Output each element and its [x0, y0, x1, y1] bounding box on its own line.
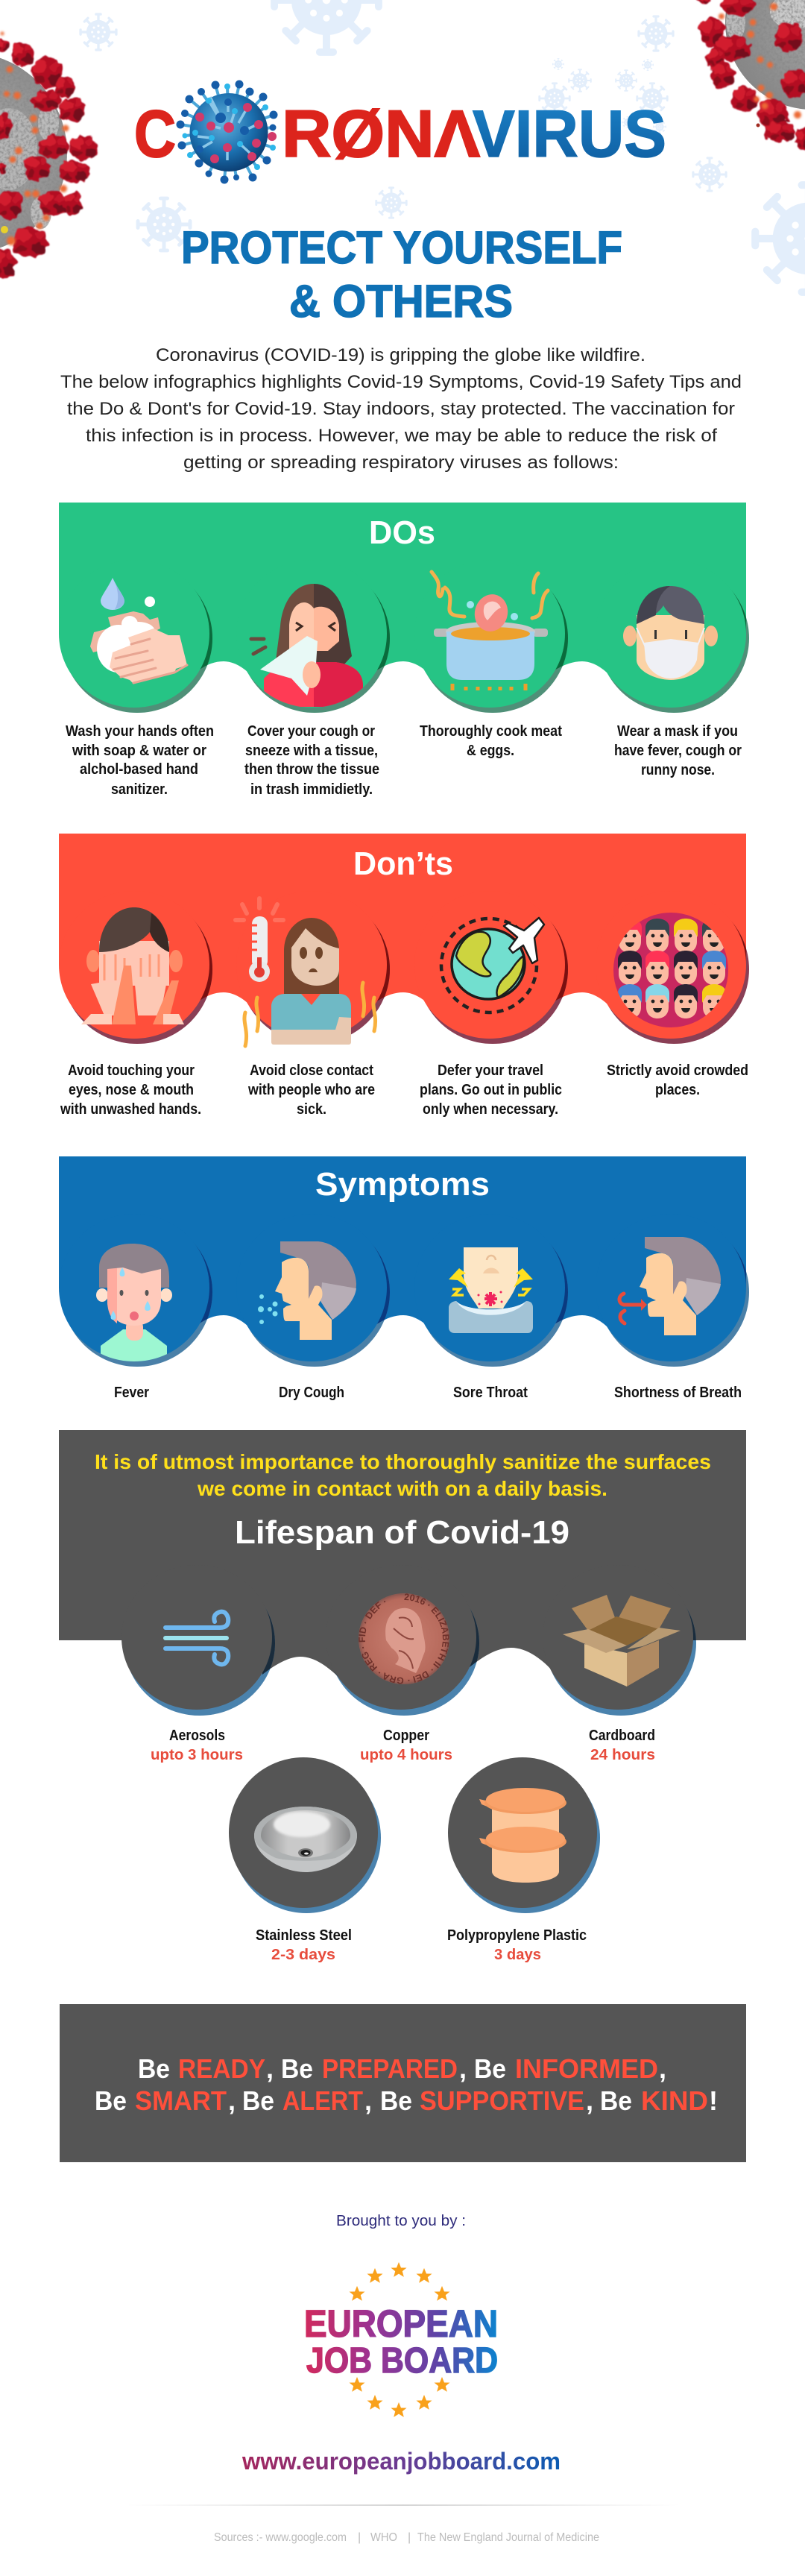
text block: line 1: PREPARED	[322, 2053, 458, 2084]
logo: European Job Board	[304, 2262, 498, 2417]
labels: DOs: sneeze with a tissue,	[245, 742, 378, 759]
text block: line 2: Be	[380, 2085, 412, 2116]
labels: Don'ts: with unwashed hands.	[60, 1100, 201, 1118]
icon: washing hands	[90, 578, 187, 684]
text block: line 2: Be	[600, 2085, 632, 2116]
sources footer: Sources :- www.google.com	[214, 2531, 347, 2544]
intro text block: the Do & Dont's for Covid-19. Stay indoors, stay protected. The vaccination for	[67, 399, 735, 419]
text block: line 1: ,	[659, 2053, 666, 2084]
labels: lower surfaces	[256, 1927, 587, 1963]
panel: DOs	[59, 503, 749, 798]
intro text block: Coronavirus (COVID-19) is gripping the globe like wildfire.	[156, 345, 645, 365]
logo: CORONAVIRUS: RØNΛ	[282, 96, 480, 171]
labels: DOs: & eggs.	[467, 742, 514, 759]
labels: DOs	[66, 722, 742, 798]
text block: line 2: SMART	[135, 2085, 227, 2116]
icon: pot cooking meat	[432, 572, 548, 690]
logo: CORONAVIRUS	[134, 81, 666, 183]
logo: CORONAVIRUS: C	[134, 96, 176, 171]
labels: Don'ts: with people who are	[247, 1081, 375, 1098]
labels: DOs: alchol-based hand	[80, 760, 198, 778]
labels: upper surfaces: Aerosols	[169, 1727, 225, 1744]
intro text block: The below infographics highlights Covid-19 Symptoms, Covid-19 Safety Tips and	[60, 372, 742, 392]
logo: CORONAVIRUS: VIRUS	[473, 96, 666, 171]
labels: Symptoms: Fever	[114, 1384, 149, 1401]
labels: DOs: sanitizer.	[111, 781, 168, 798]
text block: line 2: ,	[364, 2085, 372, 2116]
labels: Symptoms	[114, 1384, 742, 1401]
labels: DOs: Thoroughly cook meat	[420, 722, 562, 740]
labels: Don'ts: only when necessary.	[423, 1100, 558, 1118]
text block: line 2: Be	[95, 2085, 127, 2116]
callout: sanitize surfaces	[95, 1450, 711, 1500]
labels: Don'ts: sick.	[297, 1100, 326, 1118]
text block: line 2: KIND	[641, 2085, 708, 2116]
labels: Symptoms: Dry Cough	[279, 1384, 344, 1401]
text block: line 1: Be	[474, 2053, 506, 2084]
labels: Don'ts	[60, 1062, 748, 1118]
title: & OTHERS	[289, 276, 513, 327]
text block: line 2: ,	[228, 2085, 236, 2116]
labels: Don'ts: Strictly avoid crowded	[607, 1062, 748, 1079]
icon: crowd of people	[613, 913, 728, 1027]
labels: upper surfaces	[151, 1727, 655, 1763]
labels: upper surfaces: Cardboard	[589, 1727, 655, 1744]
icon: sore throat	[449, 1247, 533, 1333]
labels: lower surfaces: 3 days	[494, 1946, 541, 1963]
text block: line 2: !	[709, 2085, 718, 2116]
icon: ring of stars	[349, 2262, 450, 2417]
text block: line 1: READY	[178, 2053, 265, 2084]
icon: woman with fever and thermometer	[236, 898, 376, 1046]
icon: globe and airplane	[441, 918, 544, 1013]
icon: virus sphere in logo	[176, 81, 277, 183]
logo: European Job Board: JOB BOARD	[306, 2341, 498, 2381]
labels: Symptoms: Sore Throat	[453, 1384, 528, 1401]
labels: DOs: runny nose.	[641, 761, 715, 778]
intro text block: this infection is in process. However, we may be able to reduce the risk of	[86, 426, 717, 446]
labels: DOs: with soap & water or	[72, 742, 206, 759]
title: PROTECT YOURSELF	[181, 222, 622, 273]
icon: dry cough profile	[258, 1241, 356, 1340]
labels: upper surfaces: Copper	[383, 1727, 429, 1744]
text block: line 2: ALERT	[282, 2085, 363, 2116]
brought to you by: Brought to you by :	[336, 2213, 466, 2229]
sources footer	[214, 2531, 599, 2544]
heading: Lifespan of Covid-19: Lifespan of Covid-19	[235, 1514, 569, 1551]
lower lobes	[229, 1757, 600, 1913]
labels: DOs: then throw the tissue	[244, 760, 379, 778]
labels: DOs: have fever, cough or	[614, 742, 742, 759]
intro text block: getting or spreading respiratory viruses as follows:	[183, 453, 619, 473]
website url: www.europeanjobboard.com	[242, 2448, 561, 2475]
icon: aerosols wind	[165, 1612, 228, 1664]
labels: lower surfaces: Stainless Steel	[256, 1927, 352, 1944]
labels: Don'ts: plans. Go out in public	[420, 1081, 562, 1098]
icon: person wearing mask	[623, 586, 718, 680]
title	[181, 222, 622, 327]
text block: line 2: ,	[586, 2085, 593, 2116]
labels: Don'ts: Defer your travel	[438, 1062, 543, 1079]
labels: Don'ts: Avoid close contact	[250, 1062, 373, 1079]
virus photo: top left	[0, 31, 97, 278]
virus photo: top right	[695, 0, 805, 151]
heading: DOs: DOs	[369, 514, 435, 551]
faint virus background icons	[80, 0, 805, 292]
intro text block	[60, 345, 742, 473]
icon: cardboard box	[563, 1595, 681, 1687]
sources footer: |	[358, 2531, 361, 2544]
icon: copper coin: 2016 · ELIZABETH II · DEI · GRA · REG · FID · DEF ·	[359, 1593, 449, 1684]
icon: hands covering face	[81, 907, 184, 1024]
icon: plastic containers	[479, 1788, 566, 1883]
labels: lower surfaces: Polypropylene Plastic	[447, 1927, 587, 1944]
labels: lower surfaces: 2-3 days	[271, 1946, 335, 1963]
labels: Don'ts: eyes, nose & mouth	[69, 1081, 194, 1098]
icon: fever boy	[96, 1244, 172, 1361]
labels: DOs: Wear a mask if you	[617, 722, 738, 740]
text block: line 1	[138, 2053, 666, 2084]
text block: line 1: INFORMED	[515, 2053, 658, 2084]
labels: DOs: Cover your cough or	[247, 722, 375, 740]
text block: line 1: ,	[459, 2053, 467, 2084]
labels: upper surfaces: 24 hours	[590, 1746, 655, 1763]
text block: line 2: Be	[242, 2085, 274, 2116]
labels: Symptoms: Shortness of Breath	[614, 1384, 742, 1401]
icon: woman sneezing in tissue	[251, 584, 363, 707]
text block: line 2: SUPPORTIVE	[420, 2085, 584, 2116]
sources footer: WHO	[370, 2531, 397, 2544]
sources footer: |	[408, 2531, 411, 2544]
panel: Symptoms	[59, 1156, 749, 1401]
panel: Don'ts	[59, 834, 749, 1118]
callout: sanitize surfaces: It is of utmost importance to thoroughly sanitize the surfaces	[95, 1450, 711, 1473]
heading: Symptoms: Symptoms	[315, 1166, 490, 1203]
text block: line 1: ,	[266, 2053, 274, 2084]
text block: line 1: Be	[138, 2053, 170, 2084]
labels: upper surfaces: upto 3 hours	[151, 1746, 243, 1763]
sources footer: The New England Journal of Medicine	[417, 2531, 599, 2544]
labels: Don'ts: places.	[655, 1081, 700, 1098]
icon: stainless steel sink	[254, 1807, 357, 1872]
labels: upper surfaces: upto 4 hours	[360, 1746, 452, 1763]
icon: shortness of breath	[619, 1237, 721, 1335]
logo: European Job Board: EUROPEAN	[304, 2302, 498, 2345]
labels: DOs: Wash your hands often	[66, 722, 214, 740]
panel: Be ready banner	[60, 2004, 746, 2162]
labels: Don'ts: Avoid touching your	[68, 1062, 195, 1079]
callout: sanitize surfaces: we come in contact with on a daily basis.	[197, 1477, 607, 1500]
text block: line 1: Be	[281, 2053, 313, 2084]
text block: line 2	[95, 2085, 718, 2116]
panel: Lifespan of Covid-19	[59, 1430, 746, 1963]
labels: DOs: in trash immidietly.	[250, 781, 373, 798]
heading: Don'ts: Don’ts	[353, 845, 453, 882]
